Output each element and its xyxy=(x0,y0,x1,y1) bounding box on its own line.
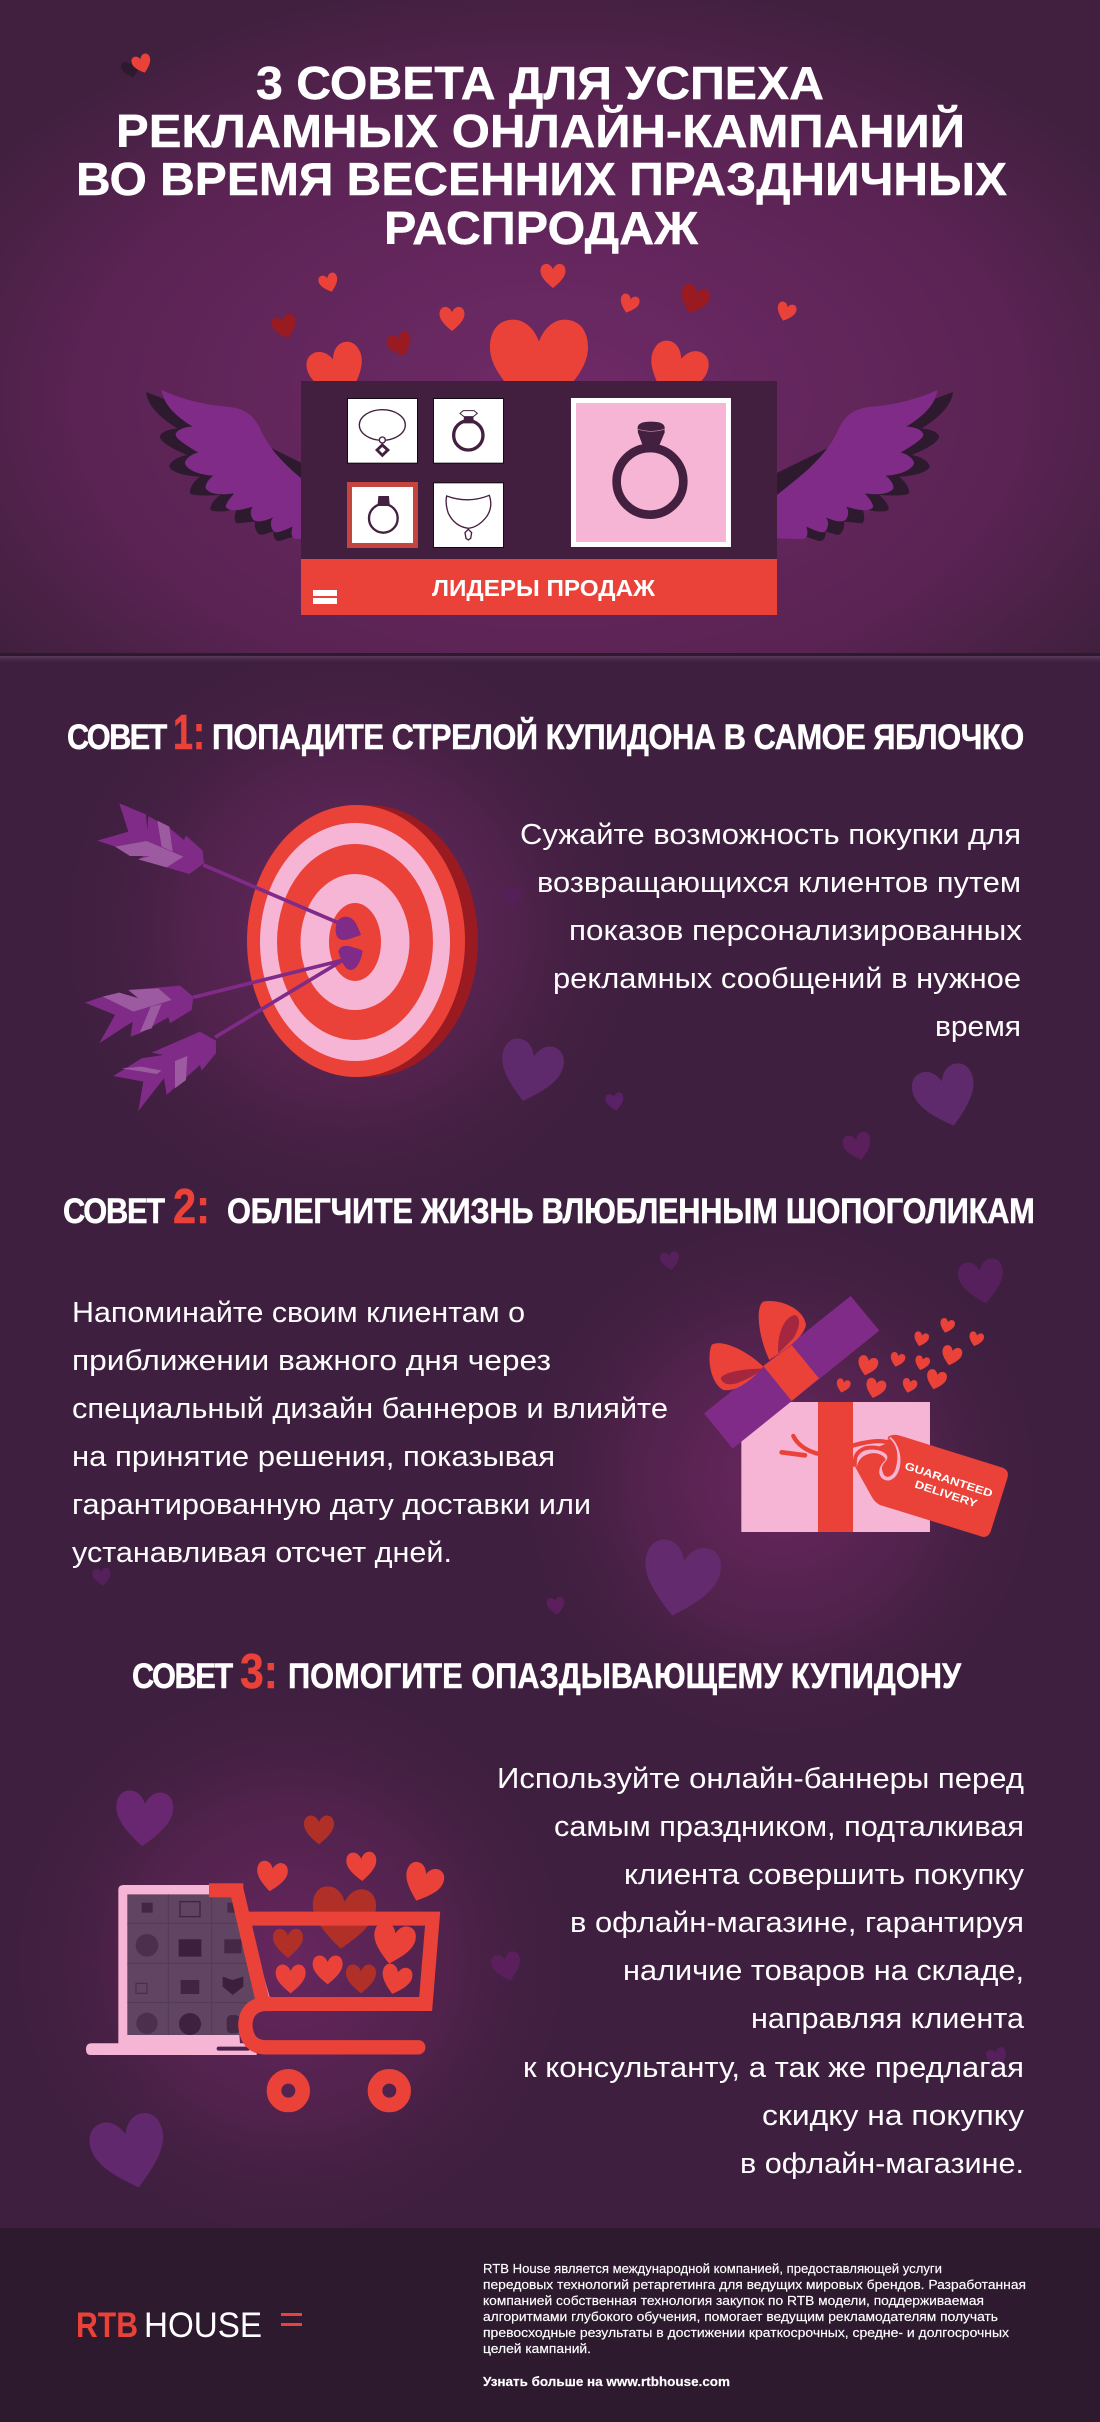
delivery tag: GUARANTEED xyxy=(903,1460,994,1500)
heading: tip 1: СОВЕТ xyxy=(67,717,167,756)
heading: tip 1 xyxy=(67,706,1024,760)
heading: tip 3: СОВЕТ xyxy=(132,1656,233,1695)
text: tip 3: в офлайн-магазине. xyxy=(740,2148,1024,2180)
wheels xyxy=(274,2076,404,2105)
left wing xyxy=(146,390,337,541)
logo xyxy=(76,2306,302,2345)
text: tip 3: скидку на покупку xyxy=(762,2100,1025,2132)
text: tip 1: время xyxy=(935,1011,1021,1043)
text: tip 1 xyxy=(520,819,1023,1043)
company description: передовых технологий ретаргетинга для ведущих мировых брендов. Разработанная xyxy=(483,2278,1026,2292)
heading: tip 2: 2: xyxy=(173,1180,210,1234)
text: tip 1: возвращающихся клиентов путем xyxy=(537,867,1021,899)
text: tip 2: гарантированную дату доставки или xyxy=(72,1489,591,1521)
website link text: Узнать больше на www.rtbhouse.com xyxy=(483,2375,730,2389)
thumbnail: necklace xyxy=(347,398,417,463)
hearts in the basket xyxy=(273,1920,418,1998)
flying hearts xyxy=(834,1317,985,1401)
heading: tip 1: ПОПАДИТЕ СТРЕЛОЙ КУПИДОНА В САМОЕ ЯБЛОЧКО xyxy=(212,716,1024,756)
heading: tip 2: ОБЛЕГЧИТЕ ЖИЗНЬ ВЛЮБЛЕННЫМ ШОПОГОЛИКАМ xyxy=(227,1191,1035,1230)
text: tip 3: к консультанту, а так же предлагая xyxy=(523,2052,1024,2084)
company description: RTB House является международной компанией, предоставляющей услуги xyxy=(483,2262,942,2276)
arrows xyxy=(85,803,363,1111)
text: tip 3: наличие товаров на складе, xyxy=(623,1955,1024,1987)
heading: tip 2 xyxy=(63,1180,1035,1234)
title xyxy=(76,57,1007,254)
title: РАСПРОДАЖ xyxy=(384,202,698,254)
right wing xyxy=(762,390,953,541)
heading: tip 3: 3: xyxy=(240,1645,278,1699)
text: tip 2: на принятие решения, показывая xyxy=(72,1441,555,1473)
text: tip 1: Сужайте возможность покупки для xyxy=(520,819,1021,851)
logo: HOUSE xyxy=(144,2306,262,2345)
box body xyxy=(741,1402,930,1532)
text: tip 3: Используйте онлайн-баннеры перед xyxy=(497,1763,1024,1795)
logo: RTB xyxy=(76,2306,138,2345)
laptop xyxy=(86,1885,270,2055)
floating hearts: header xyxy=(120,52,798,414)
decorative hearts: tip 1 xyxy=(493,886,984,1164)
box ribbon xyxy=(818,1402,853,1532)
text: tip 3: направляя клиента xyxy=(751,2003,1025,2035)
red bar xyxy=(301,559,777,615)
bow xyxy=(709,1301,806,1390)
text: tip 3: самым праздником, подталкивая xyxy=(554,1811,1024,1843)
company description: превосходные результаты в достижении краткосрочных, средне- и долгосрочных xyxy=(483,2326,1010,2340)
decorative hearts: tip 2 xyxy=(92,1251,1008,1624)
company description xyxy=(483,2262,1026,2356)
text: tip 2: приближении важного дня через xyxy=(72,1345,551,1377)
decorative hearts: tip 3 xyxy=(85,1790,1009,2196)
text: tip 3: в офлайн-магазине, гарантируя xyxy=(570,1907,1024,1939)
title: РЕКЛАМНЫХ ОНЛАЙН-КАМПАНИЙ xyxy=(116,105,965,157)
menu icon xyxy=(313,590,337,604)
bar label: ЛИДЕРЫ ПРОДАЖ xyxy=(432,575,655,601)
title: ВО ВРЕМЯ ВЕСЕННИХ ПРАЗДНИЧНЫХ xyxy=(76,153,1007,205)
arrow 2 xyxy=(85,960,343,1043)
company description: компанией собственная технология закупок по RTB модели, поддерживаемая xyxy=(483,2294,984,2308)
company description: целей кампаний. xyxy=(483,2342,591,2356)
lid xyxy=(704,1296,879,1449)
text: tip 2 xyxy=(72,1297,668,1569)
title: 3 СОВЕТА ДЛЯ УСПЕХА xyxy=(256,57,824,109)
heading: tip 1: 1: xyxy=(173,706,205,760)
text: tip 2: Напоминайте своим клиентам о xyxy=(72,1297,525,1329)
text: tip 1: рекламных сообщений в нужное xyxy=(553,963,1021,995)
delivery tag: DELIVERY xyxy=(913,1479,979,1510)
text: tip 2: специальный дизайн баннеров и влияйте xyxy=(72,1393,668,1425)
text: tip 2: устанавливая отсчет дней. xyxy=(72,1537,452,1569)
arrow 3 xyxy=(113,946,363,1111)
target with arrows xyxy=(85,803,478,1111)
panel: product banner xyxy=(301,381,777,615)
product thumbnails and preview xyxy=(347,398,728,547)
company description: алгоритмами глубокого обучения, помогает ведущим рекламодателям получать xyxy=(483,2310,998,2324)
text: tip 1: показов персонализированных xyxy=(569,915,1023,947)
laptop and shopping cart xyxy=(86,1816,447,2105)
hearts above and inside the cart xyxy=(254,1816,447,1951)
heading: tip 3: ПОМОГИТЕ ОПАЗДЫВАЮЩЕМУ КУПИДОНУ xyxy=(288,1656,962,1695)
text: tip 3: клиента совершить покупку xyxy=(624,1859,1025,1891)
thumbnail: pendant necklace xyxy=(433,483,503,547)
footer xyxy=(0,2228,1100,2422)
heading: tip 3 xyxy=(132,1645,962,1699)
thumbnail: selected ring xyxy=(349,484,415,545)
preview: large ring xyxy=(573,400,728,544)
heading: tip 2: СОВЕТ xyxy=(63,1191,165,1230)
cart body xyxy=(209,1883,433,2047)
delivery tag xyxy=(782,1435,1008,1537)
target board xyxy=(247,805,478,1077)
arrow 1 xyxy=(97,803,361,940)
gift box illustration xyxy=(704,1296,1008,1537)
text: tip 3 xyxy=(497,1763,1025,2180)
thumbnail: diamond ring xyxy=(433,398,503,463)
